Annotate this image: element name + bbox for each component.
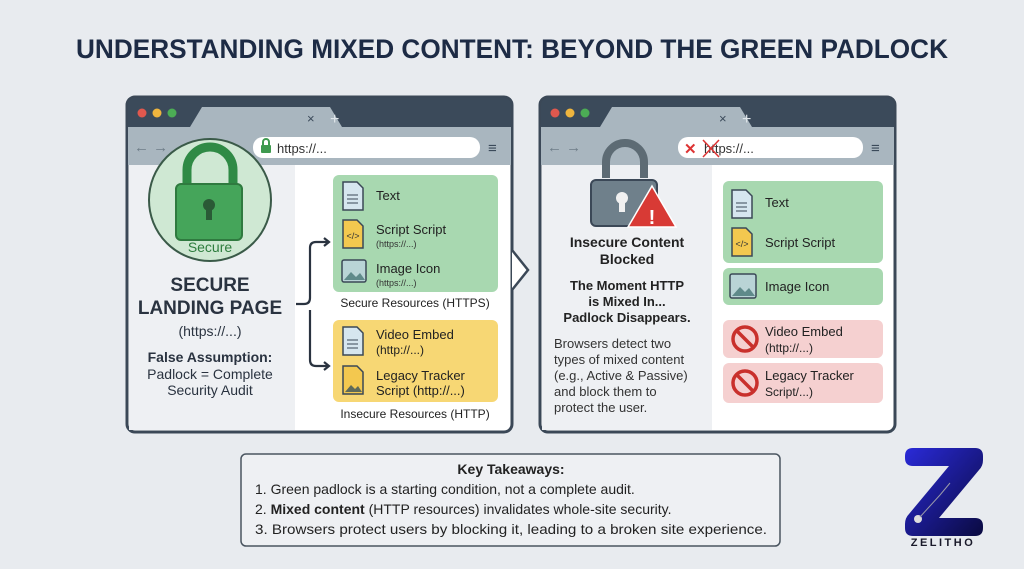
address bar: broken https: ✕ — [684, 141, 697, 158]
text: secure landing page: SECURE — [170, 275, 250, 296]
panel: key takeaways: 1. Green padlock is a starting condition, not a complete audit. — [255, 481, 635, 497]
panel: key takeaways: Key Takeaways: — [457, 461, 565, 477]
panel: key takeaways: 3. Browsers protect users by blocking it, leading to a broken site experience. — [255, 521, 767, 537]
text: secure landing page: False Assumption: — [148, 349, 272, 365]
panel: blocked browser — [540, 97, 895, 432]
title: UNDERSTANDING MIXED CONTENT: BEYOND THE GREEN PADLOCK — [76, 34, 948, 64]
panel: secure browser: × — [307, 111, 315, 126]
box: secure resources: </> — [346, 231, 360, 241]
label: secure resources: Secure Resources (HTTPS) — [340, 296, 490, 310]
icon: green padlock badge: Secure — [188, 239, 232, 255]
box: image icon: Image Icon — [765, 279, 829, 294]
logo: zelitho — [905, 448, 983, 549]
text: secure landing page: LANDING PAGE — [138, 298, 282, 319]
box: insecure resources — [333, 320, 498, 402]
box: insecure resources: Legacy Tracker — [376, 368, 466, 383]
text: browsers detect: and block them to — [554, 384, 657, 399]
box: allowed resources: </> — [735, 239, 749, 249]
box: blocked video: (http://...) — [765, 341, 813, 355]
box: blocked tracker: Script/...) — [765, 385, 813, 399]
address bar — [253, 137, 480, 158]
panel: blocked browser: ← → — [547, 139, 581, 156]
panel: key takeaways — [241, 454, 780, 546]
text: secure landing page: (https://...) — [178, 323, 242, 339]
logo: zelitho: ZELITHO — [911, 537, 975, 549]
arrow: bracket to resources — [296, 238, 329, 370]
panel: blocked browser: + — [742, 111, 751, 128]
text: blocked explanation — [563, 234, 691, 325]
text: secure landing page: Padlock = Complete — [147, 366, 273, 382]
panel: secure browser: ≡ — [488, 140, 497, 157]
box: secure resources: (https://...) — [376, 239, 417, 249]
box: secure resources: Text — [376, 188, 400, 203]
address bar: broken https: https://... — [704, 141, 754, 156]
label: insecure resources: Insecure Resources (HTTP) — [340, 407, 490, 421]
text: blocked explanation: is Mixed In... — [588, 294, 666, 309]
text: browsers detect: (e.g., Active & Passive) — [554, 368, 688, 383]
icon: grey padlock with warning: ! — [649, 207, 655, 229]
icon: green padlock badge — [149, 139, 271, 261]
box: secure resources: (https://...) — [376, 278, 417, 288]
text: blocked explanation: The Moment HTTP — [570, 278, 684, 293]
text: browsers detect: types of mixed content — [554, 352, 684, 367]
text: browsers detect: Browsers detect two — [554, 336, 671, 351]
panel: blocked browser: × — [719, 111, 727, 126]
box: insecure resources: (http://...) — [376, 343, 424, 357]
box: blocked tracker: Legacy Tracker — [765, 368, 855, 383]
panel: key takeaways: 2. Mixed content (HTTP resources) invalidates whole-site security. — [255, 501, 672, 517]
box: blocked tracker — [723, 363, 883, 403]
box: insecure resources: Script (http://...) — [376, 383, 465, 398]
box: secure resources — [333, 175, 498, 292]
panel: blocked browser: ≡ — [871, 140, 880, 157]
box: allowed resources: Script Script — [765, 235, 835, 250]
box: secure resources: Script Script — [376, 222, 446, 237]
text: blocked explanation: Padlock Disappears. — [563, 310, 691, 325]
box: allowed resources: Text — [765, 195, 789, 210]
box: secure resources: Image Icon — [376, 261, 440, 276]
address bar: https://... — [277, 141, 327, 156]
text: blocked explanation: Insecure Content — [570, 234, 685, 250]
text: blocked explanation: Blocked — [600, 251, 654, 267]
text: secure landing page: Security Audit — [167, 382, 253, 398]
address bar: broken https — [678, 137, 863, 158]
panel: secure browser — [127, 97, 512, 432]
box: allowed resources — [723, 181, 883, 263]
panel: secure browser: + — [330, 111, 339, 128]
text: browsers detect — [554, 336, 688, 415]
box: insecure resources: Video Embed — [376, 327, 454, 342]
panel: secure browser: ← → — [134, 139, 168, 156]
icon: grey padlock with warning — [591, 143, 676, 229]
box: blocked video: Video Embed — [765, 324, 843, 339]
text: browsers detect: protect the user. — [554, 400, 647, 415]
arrow: transition — [512, 250, 528, 290]
box: blocked video — [723, 320, 883, 358]
text: secure landing page — [138, 275, 282, 398]
box: image icon — [723, 268, 883, 305]
